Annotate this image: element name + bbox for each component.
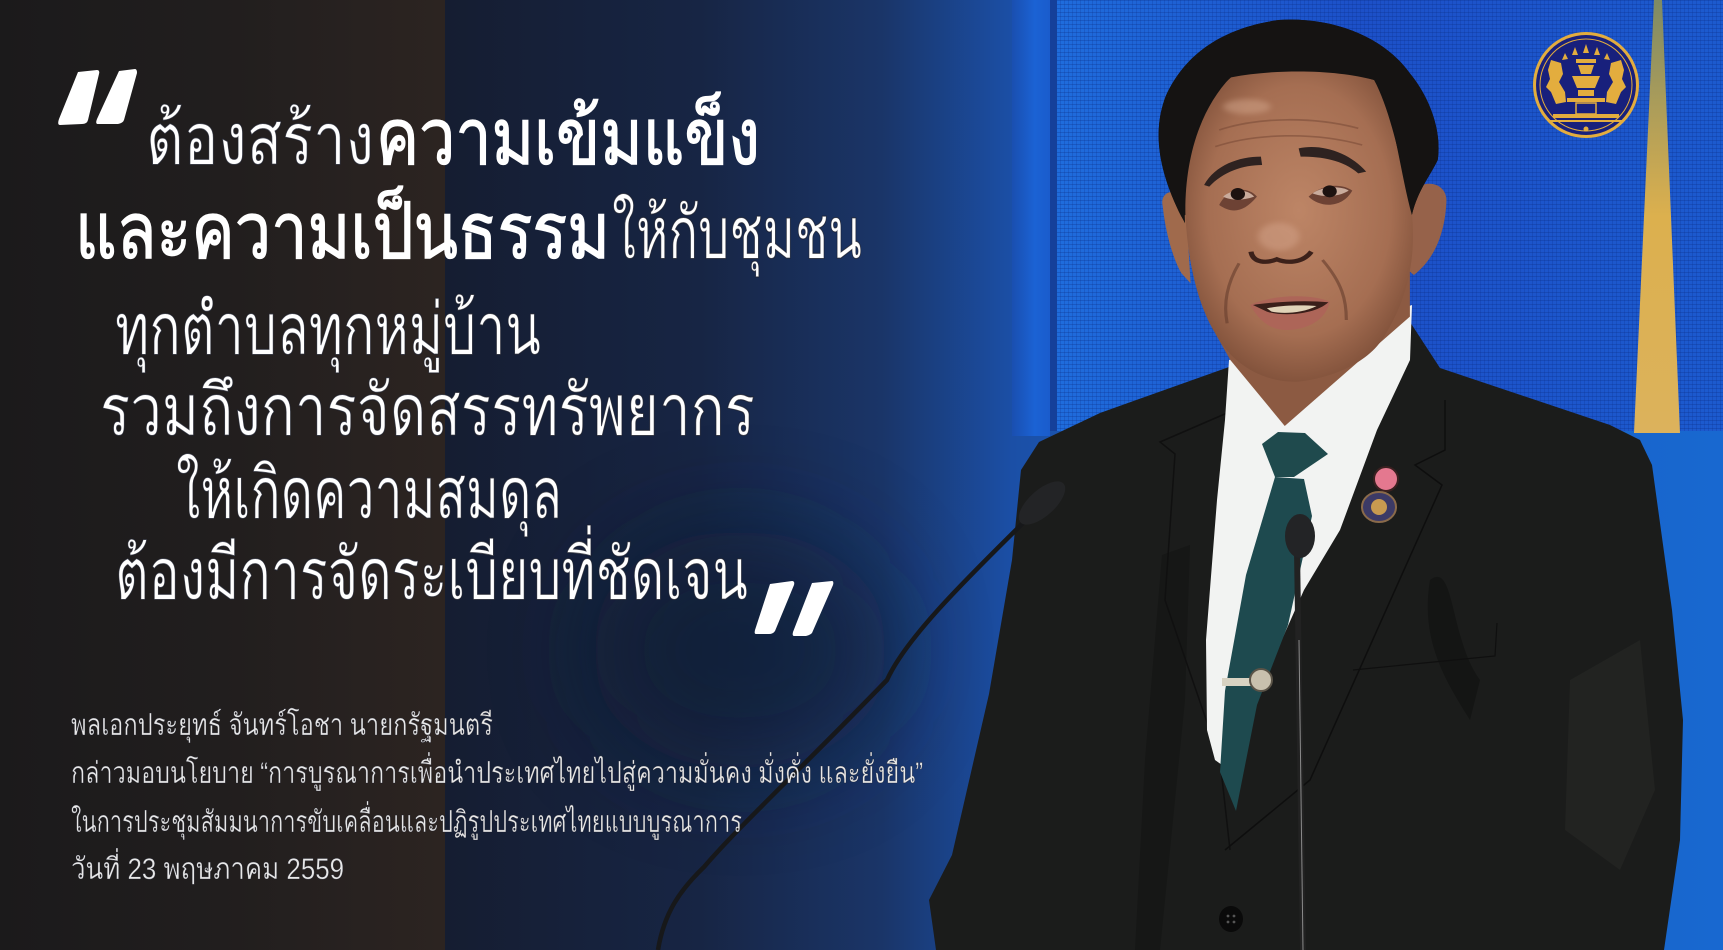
- head: mouth: [1250, 296, 1330, 330]
- suit: pocket outline: [1353, 623, 1497, 670]
- head: face: [1185, 71, 1413, 382]
- attribution: event: ในการประชุมสัมมนาการขับเคลื่อนและปฏิรูปประเทศไทยแบบบูรณาการ: [71, 801, 742, 841]
- quote line 2: และความเป็นธรรม: [75, 186, 610, 275]
- suit: dark fold at pocket: [1428, 577, 1480, 720]
- quote line 3: ทุกตำบลทุกหมู่บ้าน: [115, 290, 541, 373]
- attribution: date: วันที่ 23 พฤษภาคม 2559: [71, 848, 344, 886]
- head: forehead wrinkles: [1215, 120, 1362, 147]
- stage: LED screen: [1057, 0, 1723, 431]
- person: suit jacket: [929, 322, 1683, 950]
- background: stage blue lower right: [1012, 0, 1723, 950]
- quote line 1: ต้องสร้าง: [146, 100, 374, 180]
- headline quote: [75, 92, 862, 615]
- head: forehead highlight: [1223, 99, 1271, 114]
- person: seal lapel pin: [1362, 492, 1396, 522]
- attribution: speaker name: พลเอกประยุทธ์ จันทร์โอชา นายกรัฐมนตรี: [71, 707, 493, 744]
- quote line 6: ต้องมีการจัดระเบียบที่ชัดเจน: [115, 525, 748, 615]
- person: pink lapel pin: [1374, 467, 1398, 491]
- suit: right lapel edge: [1225, 400, 1445, 850]
- head: neck: [1215, 267, 1410, 426]
- stage: bright blue side strip: [1012, 0, 1050, 436]
- head: nose: [1251, 223, 1311, 262]
- suit: left lapel edge: [1160, 410, 1234, 850]
- government seal: [1533, 32, 1639, 138]
- person: white shirt: [1206, 305, 1412, 765]
- quote line 2: ให้กับชุมชน: [612, 193, 862, 277]
- attribution text: [71, 707, 923, 886]
- head: left ear: [1162, 192, 1191, 283]
- background: dark shadow blotch: [590, 530, 890, 770]
- quote line 1: ความเข้มแข็ง: [376, 92, 760, 181]
- stage: gold vertical strip: [1634, 0, 1680, 433]
- person: tie clip: [1222, 669, 1272, 691]
- quote line 1: [146, 92, 760, 181]
- person: tie: [1220, 432, 1328, 811]
- head: nasolabial folds: [1226, 260, 1346, 323]
- head: right eyebrow: [1299, 147, 1366, 173]
- head: hair base: [1159, 20, 1439, 217]
- quote line 5: ให้เกิดความสมดุล: [176, 453, 562, 537]
- closing quotation mark: [755, 581, 833, 636]
- head: right eye: [1309, 185, 1352, 205]
- suit: lighter sleeve sheen: [1565, 640, 1655, 870]
- attribution: policy title: กล่าวมอบนโยบาย “การบูรณาการเพื่อนำประเทศไทยไปสู่ความมั่นคง มั่งคั่ง และยั่งยืน”: [71, 752, 923, 791]
- background: dark left panel: [0, 0, 445, 950]
- person: head: [1159, 20, 1446, 426]
- suit: jacket button: [1219, 906, 1243, 932]
- head: hair: [1159, 20, 1439, 223]
- head: left eye: [1219, 188, 1257, 210]
- head: right ear: [1404, 184, 1446, 275]
- head: left eyebrow: [1204, 157, 1262, 187]
- background: navy to blue gradient: [445, 0, 1012, 950]
- stage: dark gap beside screen: [1050, 0, 1057, 431]
- suit: dark fold under chest: [1135, 545, 1190, 950]
- microphone: left boom: [658, 474, 1072, 950]
- quote line 4: รวมถึงการจัดสรรทรัพยากร: [100, 371, 755, 451]
- opening quotation mark: [58, 69, 137, 125]
- microphone: centre stand: [1285, 514, 1315, 950]
